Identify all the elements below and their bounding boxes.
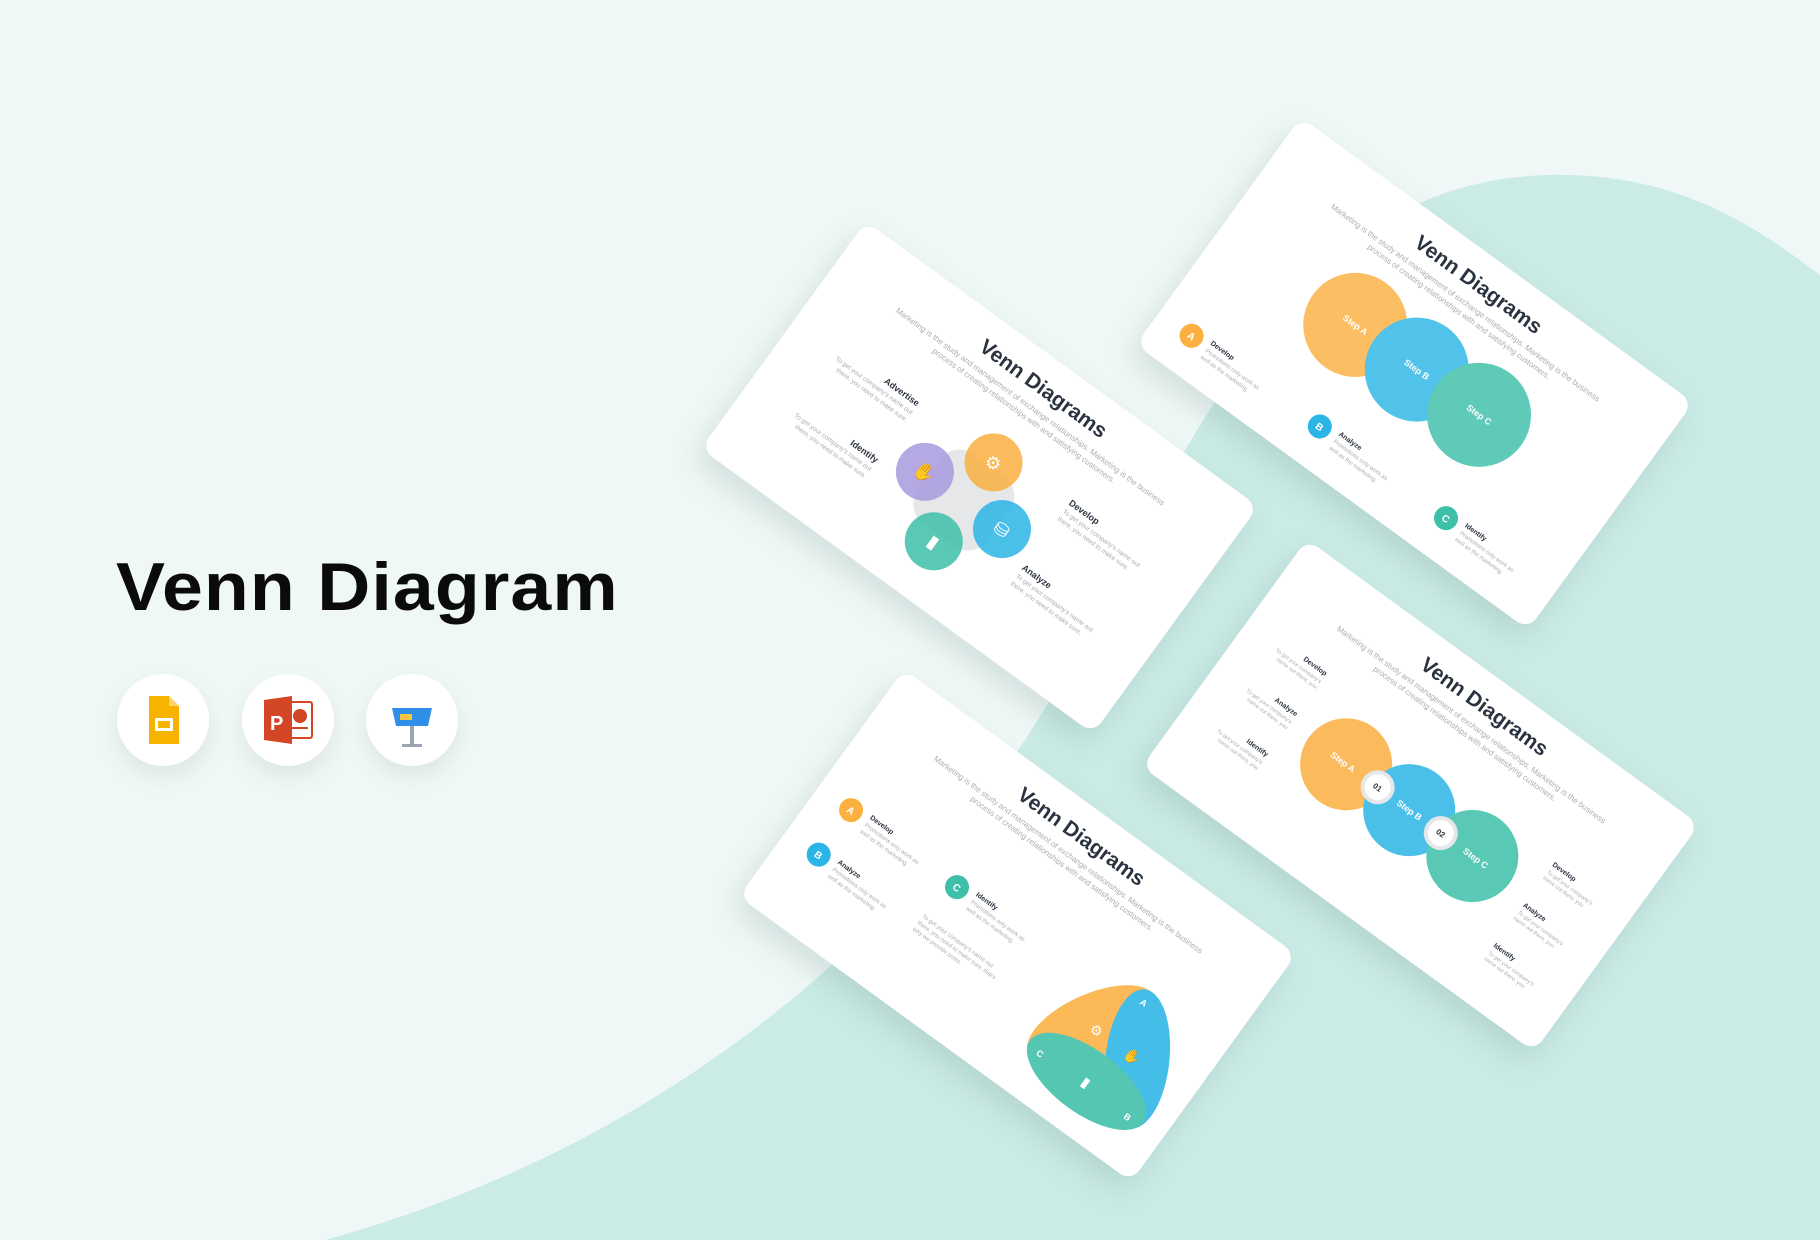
paragraph: Marketing is the study and management of exchange relationships. Marketing is the business bbox=[894, 306, 1166, 507]
card: three-lobe venn bbox=[739, 669, 1296, 1182]
card: three-lobe venn: Promotions only work as bbox=[863, 823, 919, 866]
card: three-lobe venn: A bbox=[1138, 997, 1150, 1009]
labels bbox=[841, 368, 1102, 591]
card: three-lobe venn: well as the marketing. bbox=[858, 829, 909, 868]
card: three steps chain: To get your company's bbox=[1487, 951, 1535, 988]
card: three steps overlapping: Promotions only work as bbox=[1204, 348, 1260, 392]
card: three steps chain: name out there, you bbox=[1512, 916, 1555, 949]
card: three steps chain: Step B bbox=[1395, 798, 1424, 823]
card: three steps overlapping: Step C bbox=[1465, 402, 1494, 428]
venn circles bbox=[1283, 252, 1552, 487]
card: three steps chain: 01 bbox=[1371, 781, 1384, 794]
card: three steps overlapping: Identify bbox=[1463, 523, 1488, 543]
card: three steps chain: name out there, you bbox=[1275, 657, 1318, 691]
card: four circles: there, you need to make sure. bbox=[793, 424, 867, 480]
card: three steps overlapping: Step A bbox=[1341, 313, 1370, 338]
card: three steps chain: name out there, you bbox=[1483, 956, 1526, 990]
card: three-lobe venn: there, you need to make sure, that's bbox=[916, 920, 997, 981]
side labels: Develop bbox=[1551, 862, 1577, 883]
side labels: Analyze bbox=[1521, 902, 1547, 923]
card: three-lobe venn: To get your company's name out bbox=[920, 914, 994, 970]
card: three-lobe venn: C bbox=[950, 882, 962, 895]
badges bbox=[1175, 317, 1463, 537]
card: three-lobe venn: Identify bbox=[974, 892, 999, 912]
labels: Advertise bbox=[882, 376, 921, 408]
card: three steps overlapping: Promotions only work as bbox=[1458, 531, 1514, 574]
card: three steps overlapping: Analyze bbox=[1337, 431, 1363, 452]
paragraph: Marketing is the study and management of exchange relationships. Marketing is the business bbox=[1329, 202, 1601, 403]
paragraph: process of creating relationships with and satisfying customers. bbox=[1366, 242, 1552, 381]
card: three steps overlapping: B bbox=[1313, 421, 1325, 434]
card: three steps chain: To get your company's bbox=[1274, 648, 1322, 685]
paragraph: Marketing is the study and management of exchange relationships. Marketing is the business bbox=[932, 754, 1204, 955]
card: three-lobe venn: ▮ bbox=[1078, 1074, 1093, 1092]
side labels: Analyze bbox=[1273, 697, 1299, 718]
card: three steps chain: To get your company's bbox=[1245, 688, 1293, 726]
card: three steps overlapping: Develop bbox=[1209, 340, 1235, 362]
card: three-lobe venn: why we provide posts. bbox=[910, 926, 963, 967]
card: three steps chain: name out there, you bbox=[1541, 875, 1584, 909]
badges bbox=[802, 793, 974, 948]
card: three-lobe venn: Analyze bbox=[836, 859, 862, 880]
card: three-lobe venn: A bbox=[844, 805, 856, 818]
circle icons: ⚙ bbox=[980, 450, 1005, 477]
paragraph: process of creating relationships with and satisfying customers. bbox=[969, 794, 1155, 933]
side labels bbox=[1231, 656, 1589, 964]
circle icons: ⛁ bbox=[989, 517, 1013, 543]
card: three-lobe venn: well as the marketing. bbox=[825, 873, 877, 913]
card: three steps overlapping: well as the marketing. bbox=[1198, 354, 1250, 394]
card: four circles: To get your company's name out bbox=[1014, 573, 1094, 634]
card: three-lobe venn: Develop bbox=[868, 815, 895, 836]
paragraph: process of creating relationships with and satisfying customers. bbox=[1372, 664, 1558, 803]
card: three steps chain: 02 bbox=[1434, 827, 1447, 840]
card: three steps chain bbox=[1142, 539, 1699, 1052]
title: Venn Diagram bbox=[116, 549, 619, 625]
labels: Develop bbox=[1067, 498, 1102, 527]
card title: Venn Diagrams bbox=[1410, 231, 1546, 339]
card: three steps chain: To get your company's bbox=[1215, 729, 1263, 766]
card: three-lobe venn: B bbox=[1122, 1111, 1133, 1123]
center shape bbox=[904, 440, 1024, 560]
card: three-lobe venn: C bbox=[1034, 1048, 1046, 1060]
side labels: Identify bbox=[1492, 942, 1516, 963]
card: three-lobe venn: Promotions only work as bbox=[831, 867, 887, 910]
paragraph: process of creating relationships with and satisfying customers. bbox=[931, 346, 1117, 485]
card title: Venn Diagrams bbox=[1416, 653, 1552, 761]
card: three steps chain: Step C bbox=[1461, 846, 1490, 871]
labels: Analyze bbox=[1020, 563, 1053, 591]
card: three-lobe venn: ✋ bbox=[1120, 1045, 1144, 1069]
labels: Identify bbox=[848, 438, 880, 465]
venn lobes bbox=[994, 927, 1233, 1161]
icon: powerpoint: P bbox=[270, 713, 283, 735]
icon: google slides bbox=[117, 674, 209, 766]
card: three steps overlapping: Promotions only work as bbox=[1332, 439, 1388, 482]
circle icons: ✋ bbox=[909, 457, 940, 488]
card: three steps overlapping: well as the marketing. bbox=[1453, 537, 1504, 576]
card: four circles: there, you need to make sure. bbox=[1056, 516, 1130, 572]
card: three steps overlapping: Step B bbox=[1402, 357, 1432, 382]
side labels: Identify bbox=[1245, 738, 1269, 759]
card: three steps overlapping: A bbox=[1185, 330, 1197, 344]
card: four circles: there, you need to make sure. bbox=[1009, 580, 1083, 637]
card: three steps overlapping bbox=[1136, 117, 1693, 630]
circles bbox=[854, 392, 1071, 610]
card: three steps overlapping: C bbox=[1439, 513, 1451, 526]
card: four circles: there, you need to make sure. bbox=[835, 367, 909, 424]
card: four circles: To get your company's name out bbox=[793, 412, 873, 473]
side labels: Develop bbox=[1302, 656, 1328, 678]
card title: Venn Diagrams bbox=[975, 335, 1111, 443]
icon: keynote bbox=[366, 674, 458, 766]
card: three-lobe venn: Promotions only work as bbox=[969, 900, 1025, 943]
card: three steps chain: name out there, you bbox=[1216, 738, 1259, 772]
card: three steps chain: name out there, you bbox=[1245, 697, 1289, 731]
card: three-lobe venn: ⚙ bbox=[1086, 1021, 1106, 1041]
circles bbox=[1282, 700, 1537, 920]
card: three steps overlapping: well as the marketing. bbox=[1326, 445, 1378, 485]
card: three-lobe venn: well as the marketing. bbox=[964, 906, 1015, 945]
card: three-lobe venn: B bbox=[812, 849, 824, 862]
circle icons: ▮ bbox=[923, 531, 943, 554]
card title: Venn Diagrams bbox=[1013, 783, 1149, 891]
circle icons bbox=[879, 419, 1042, 584]
card: three steps chain: To get your company's bbox=[1516, 910, 1564, 947]
card: four circles bbox=[701, 221, 1258, 734]
card: three steps chain: To get your company's bbox=[1545, 870, 1594, 907]
icon: powerpoint bbox=[242, 674, 334, 766]
card: four circles: To get your company's name out bbox=[834, 355, 914, 416]
card: four circles: To get your company's name out bbox=[1061, 508, 1141, 569]
paragraph: Marketing is the study and management of exchange relationships. Marketing is the business bbox=[1335, 624, 1607, 825]
card: three steps chain: Step A bbox=[1329, 750, 1358, 775]
